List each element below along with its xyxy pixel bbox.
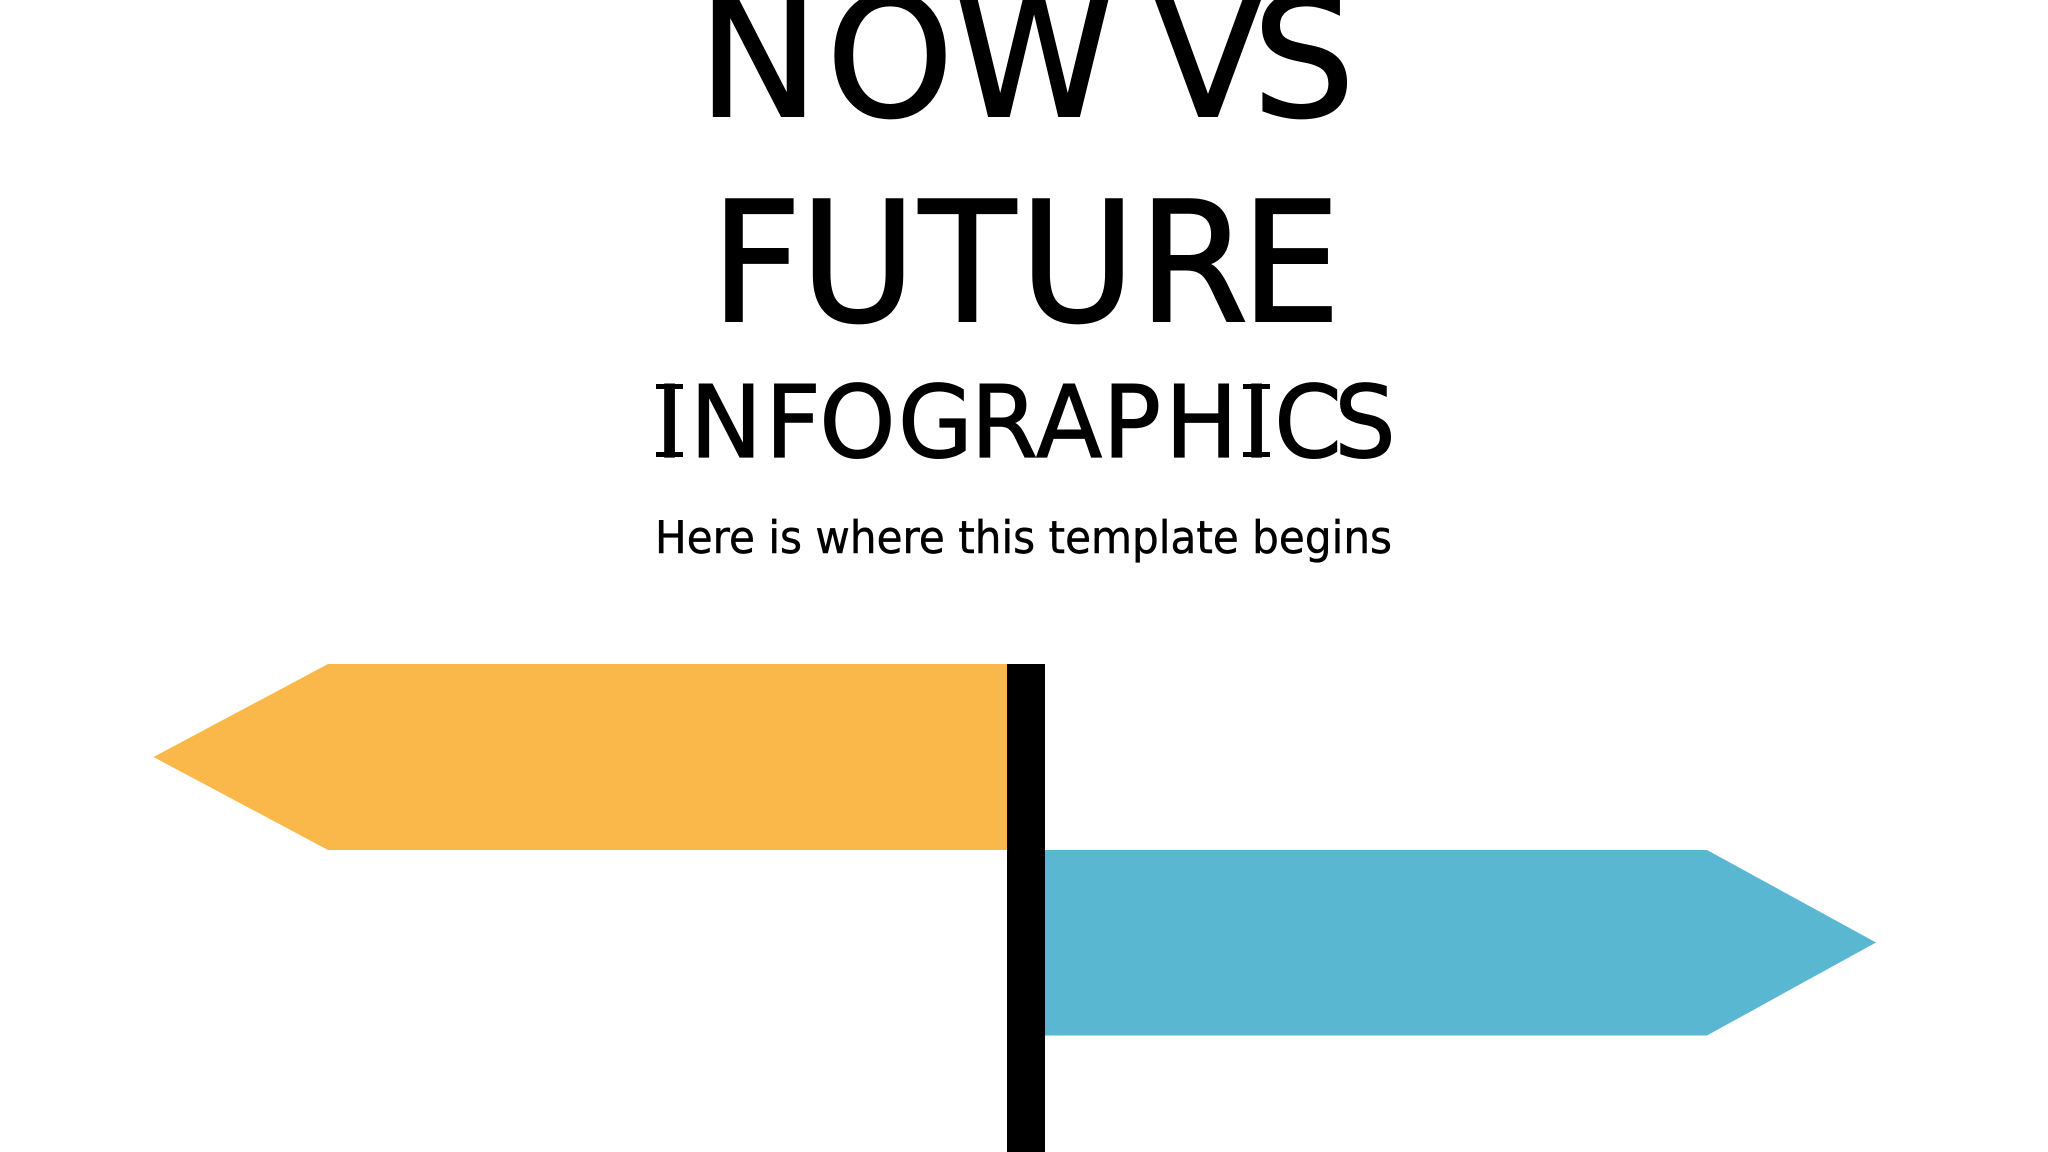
arrow: blue sign pointing right bbox=[1045, 850, 1876, 1036]
tagline: Here is where this template begins bbox=[655, 511, 1392, 564]
subtitle: infographics: INFOGRAPHICS bbox=[655, 364, 1396, 481]
arrow: orange sign pointing left bbox=[154, 664, 1007, 850]
signpost pole bbox=[1007, 664, 1045, 1152]
title: now vs future: FUTURE bbox=[711, 167, 1341, 361]
title: now vs future bbox=[698, 0, 1355, 361]
